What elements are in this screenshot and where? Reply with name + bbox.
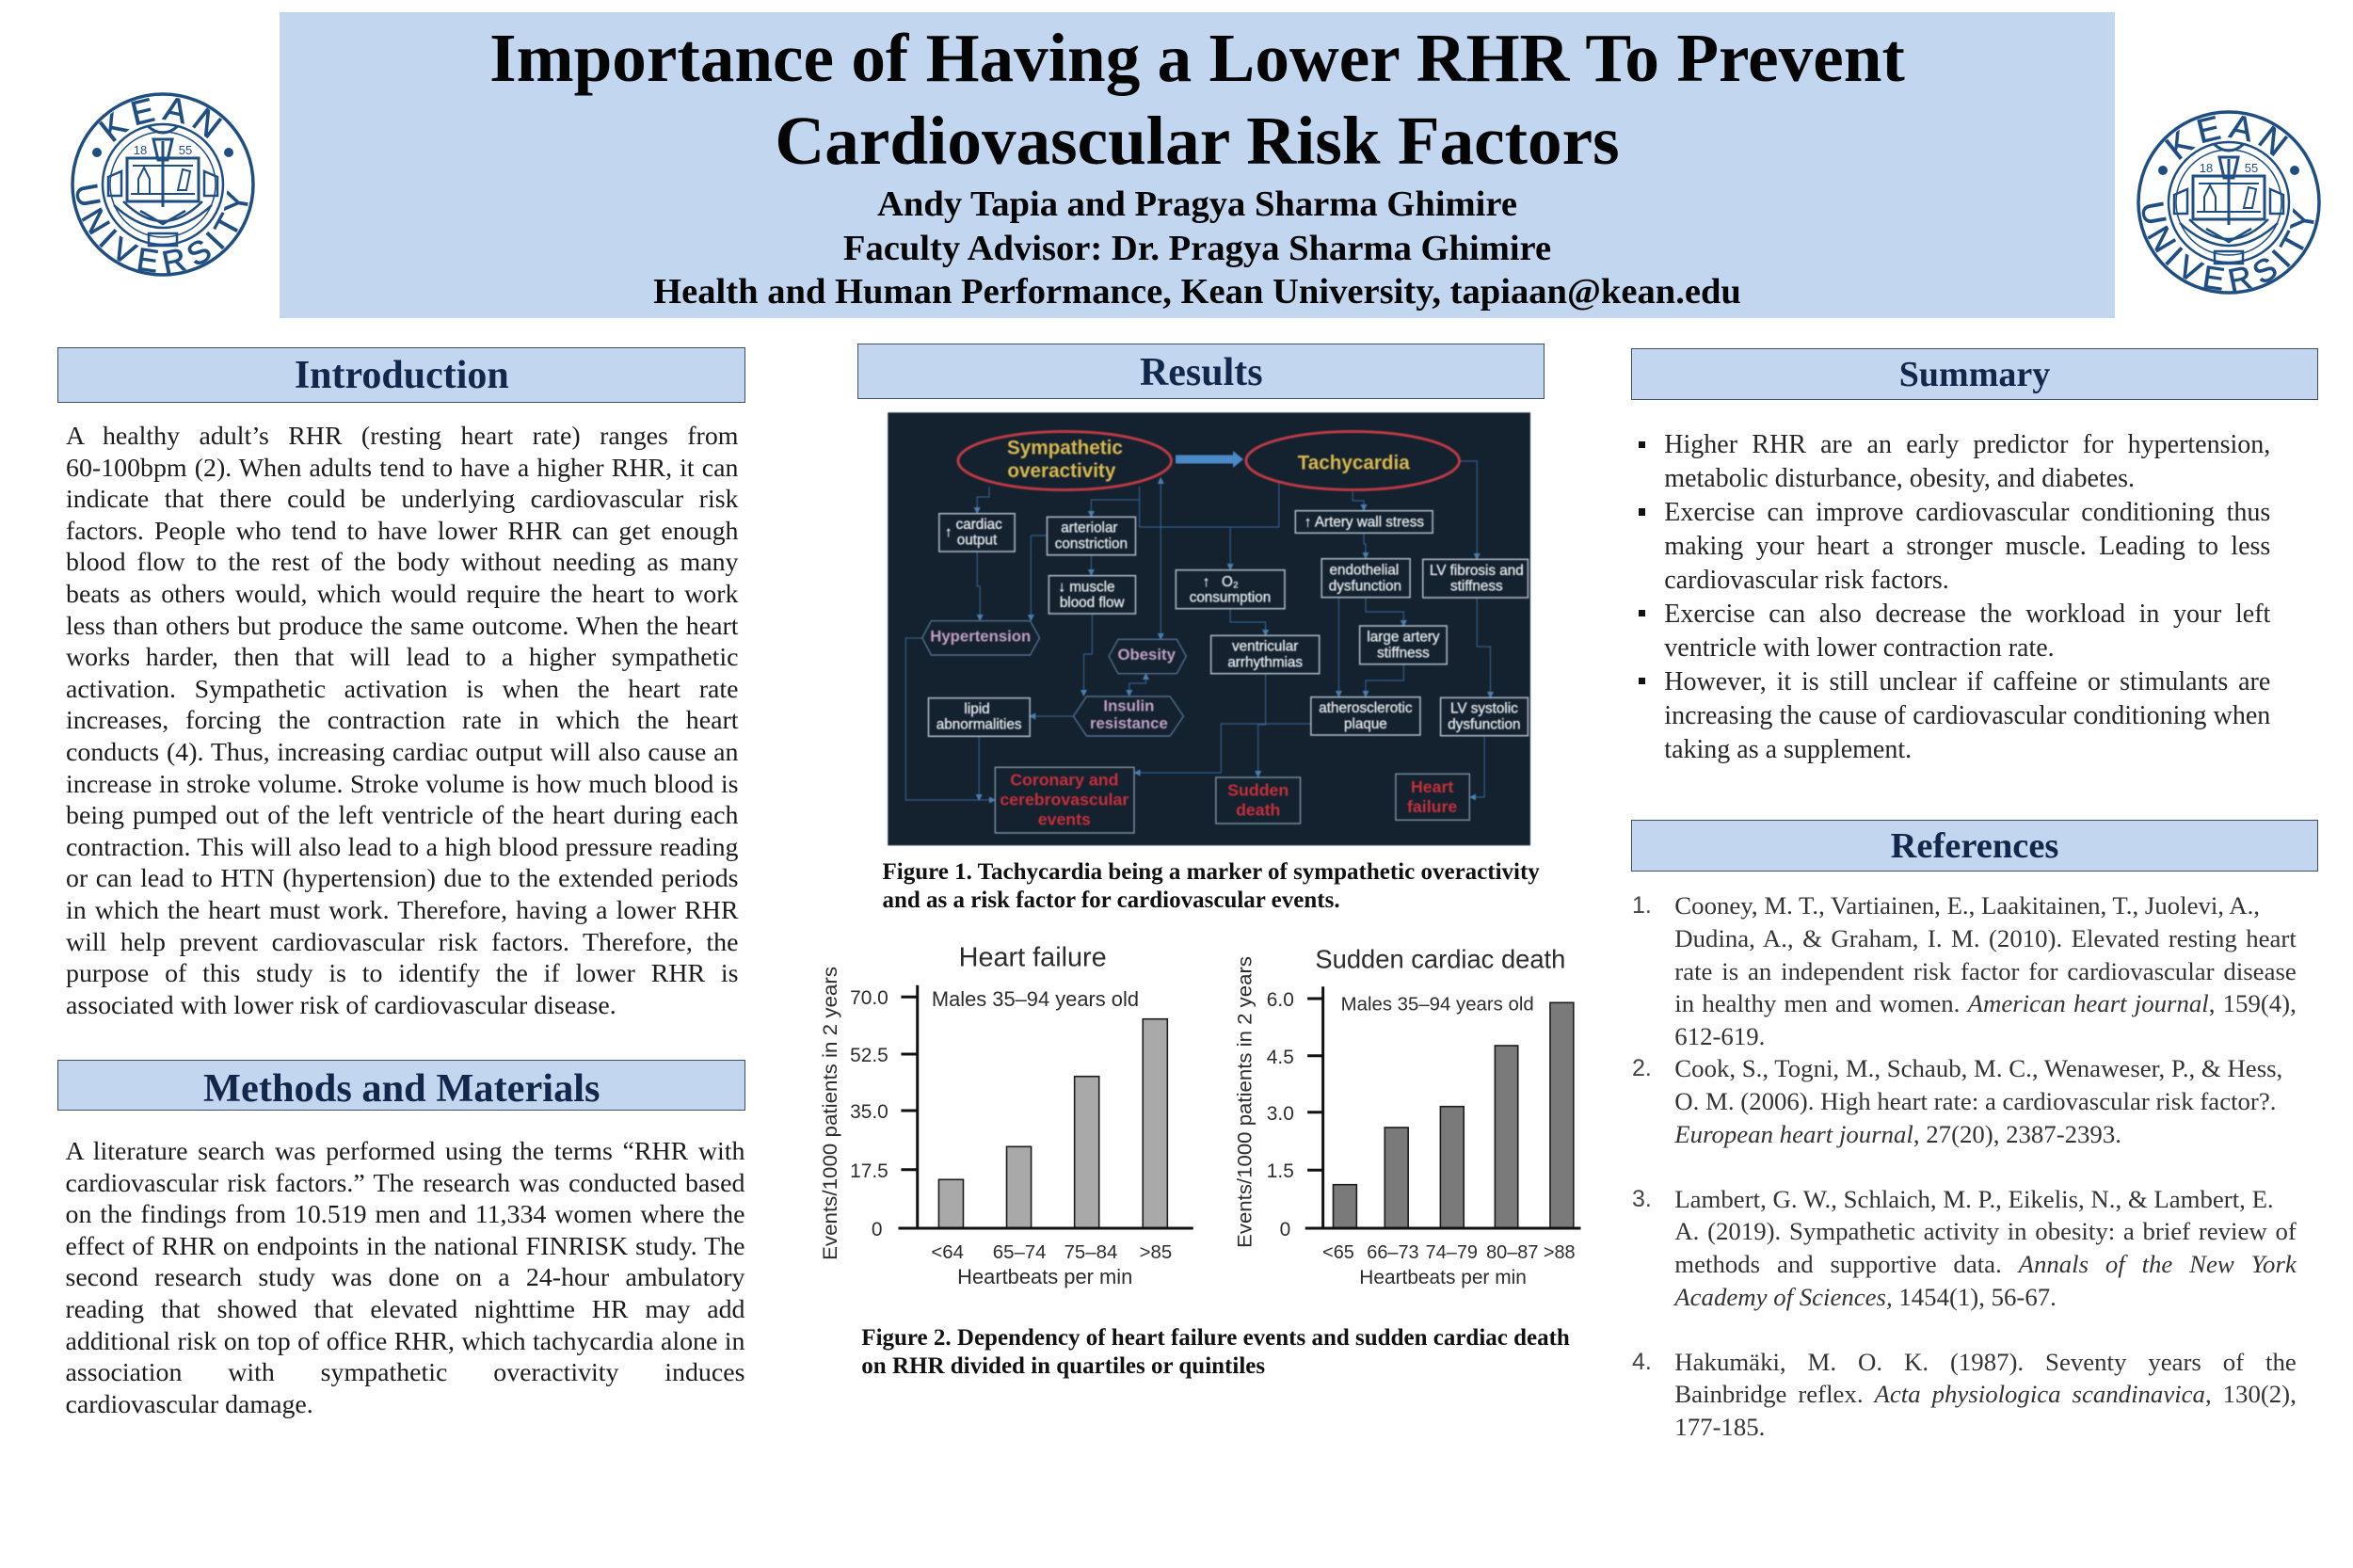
heading: References: References (1891, 826, 2058, 866)
hexagon labels: resistance (1090, 714, 1168, 732)
reference 3: Lambert, G. W., Schlaich, M. P., Eikelis, N., & Lambert, E. (1674, 1185, 2274, 1213)
box labels: stiffness (1377, 645, 1430, 661)
icon: Kean University seal left: KEAN (99, 98, 222, 142)
text block: introduction: increases, forcing the contraction rate in which the heart (66, 706, 738, 735)
text block: introduction: A healthy adult’s RHR (resting heart rate) ranges from (66, 422, 738, 451)
chart: heart failure: 0 (872, 1219, 883, 1240)
box labels: endothelial (1329, 563, 1399, 579)
text block: methods (66, 1137, 745, 1419)
reference 3: 3. (1632, 1186, 1652, 1212)
text block: introduction: or can lead to HTN (hypertension) due to the extended periods (66, 864, 738, 893)
header banner (280, 12, 2115, 318)
box labels: blood flow (1060, 595, 1125, 611)
reference 1: rate is an independent risk factor for cardiovascular disease (1674, 957, 2297, 985)
chart: sudden cardiac death: Events/1000 patients in 2 years (1234, 956, 1256, 1248)
hexagon labels: Insulin (1103, 696, 1154, 714)
box labels: cardiac (956, 517, 1002, 533)
bullet text: increasing the cause of cardiovascular conditioning when (1664, 701, 2270, 730)
icon: Kean University seal left (71, 92, 255, 277)
text block: introduction: will help prevent cardiovascular risk factors. Therefore, the (66, 928, 738, 956)
reference 4: Bainbridge reflex. Acta physiologica scandinavica, 130(2), (1674, 1380, 2297, 1408)
text block: introduction: works harder, then that will lead to a higher sympathetic (66, 643, 738, 672)
chart: sudden cardiac death (1234, 944, 1580, 1288)
box labels: ↓ muscle (1058, 579, 1115, 595)
ellipse: tachycardia (1246, 431, 1459, 489)
heading: Summary (1631, 348, 2318, 399)
box labels: consumption (1190, 589, 1271, 605)
heading: Methods and Materials (57, 1060, 745, 1111)
reference 1: Cooney, M. T., Vartiainen, E., Laakitainen, T., Juolevi, A., (1674, 891, 2260, 920)
chart: heart failure: 70.0 (850, 987, 888, 1009)
ellipse: sympathetic overactivity (958, 431, 1172, 489)
chart: heart failure: 35.0 (850, 1101, 888, 1123)
chart: sudden cardiac death: 66–73 (1367, 1242, 1419, 1263)
reference 1 (1632, 891, 2297, 1050)
bullet text: taking as a supplement. (1664, 735, 1912, 764)
chart: heart failure: <64 (931, 1241, 964, 1263)
box labels: dysfunction (1448, 716, 1520, 732)
reference 1: in healthy men and women. American heart journal, 159(4), (1674, 989, 2297, 1017)
text block: introduction: in which the heart must work. Therefore, having a lower RHR (66, 896, 738, 925)
box labels: ↑ (945, 525, 952, 540)
heading: Results (857, 344, 1545, 399)
chart: heart failure: Heartbeats per min (957, 1265, 1132, 1288)
chart: sudden cardiac death: 6.0 (1267, 989, 1294, 1011)
text block: introduction: contraction. This will also lead to a high blood pressure reading (66, 833, 738, 862)
heading: Summary: Summary (1899, 355, 2050, 394)
icon: Kean University seal left: 18 (134, 143, 147, 157)
title: Importance of Having a Lower RHR To Prevent (489, 20, 1905, 96)
text block: introduction: activation. Sympathetic activation is when the heart rate (66, 675, 738, 704)
heading: Introduction (57, 347, 745, 403)
reference 4: 177-185. (1674, 1413, 1765, 1441)
box labels: LV systolic (1450, 701, 1518, 717)
chart: heart failure: 52.5 (850, 1045, 888, 1066)
reference 1: Dudina, A., & Graham, I. M. (2010). Elevated resting heart (1674, 924, 2297, 952)
text block: methods: additional risk on top of office RHR, which tachycardia alone in (66, 1327, 745, 1356)
heading: Introduction: Introduction (295, 354, 509, 397)
text block: methods: second research study was done on a 24-hour ambulatory (66, 1263, 745, 1292)
hexagons (922, 621, 1186, 736)
text block: introduction: increase in stroke volume. Stroke volume is how much blood is (66, 770, 738, 799)
authors and affiliation: Health and Human Performance, Kean University, tapiaan@kean.edu (653, 272, 1741, 312)
bullet text: cardiovascular risk factors. (1664, 566, 1949, 595)
text block: introduction: conducts (4). Thus, increasing cardiac output will also cause an (66, 738, 738, 767)
box labels: plaque (1344, 716, 1387, 732)
chart: sudden cardiac death: Sudden cardiac death (1315, 944, 1565, 973)
text block: methods: A literature search was performed using the terms “RHR with (66, 1137, 745, 1166)
caption: figure 1 (883, 859, 1540, 913)
box labels: LV fibrosis and (1430, 563, 1524, 579)
reference 1: 612-619. (1674, 1022, 1765, 1050)
heading: Results: Results (1140, 351, 1263, 394)
chart: sudden cardiac death: Heartbeats per min (1359, 1267, 1527, 1288)
outcome labels: cerebrovascular (1000, 790, 1128, 808)
hexagon labels (930, 628, 1176, 732)
authors and affiliation: Andy Tapia and Pragya Sharma Ghimire (877, 184, 1517, 224)
ellipse: sympathetic overactivity: overactivity (1007, 460, 1116, 482)
chart: heart failure: Events/1000 patients in 2 years (820, 967, 841, 1260)
caption: figure 1: and as a risk factor for cardiovascular events. (883, 888, 1340, 913)
chart: sudden cardiac death: 74–79 (1426, 1242, 1478, 1263)
list: references (1632, 891, 2297, 1441)
hexagon labels: Hypertension (930, 628, 1031, 646)
outcome labels: Coronary and (1010, 770, 1118, 789)
text block: methods: cardiovascular risk factors.” The research was conducted based (66, 1169, 745, 1198)
caption: figure 2: Figure 2. Dependency of heart failure events and sudden cardiac death (861, 1325, 1570, 1351)
chart: sudden cardiac death: 1.5 (1267, 1160, 1294, 1182)
outcome boxes (995, 767, 1469, 833)
outcome labels: failure (1407, 797, 1457, 816)
outcome labels: Heart (1411, 777, 1453, 796)
white-text boxes (928, 511, 1528, 736)
text block: introduction: blood flow to the rest of the body without needing as many (66, 548, 738, 577)
chart: sudden cardiac death: >88 (1544, 1242, 1576, 1263)
box labels: arrhythmias (1227, 654, 1303, 670)
box labels: atherosclerotic (1319, 700, 1413, 716)
chart: heart failure: 65–74 (993, 1241, 1047, 1263)
box labels: ↑ Artery wall stress (1305, 514, 1424, 530)
reference 3: Academy of Sciences, 1454(1), 56-67. (1674, 1283, 2057, 1311)
text block: methods: cardiovascular damage. (66, 1390, 313, 1419)
caption: figure 2 (861, 1325, 1570, 1379)
text block: introduction: associated with lower risk of cardiovascular disease. (66, 991, 616, 1020)
chart: heart failure (820, 943, 1193, 1288)
icon: Kean University seal right (2137, 110, 2321, 295)
chart: sudden cardiac death: 3.0 (1267, 1103, 1294, 1125)
text block: introduction (66, 422, 738, 1020)
reference 2: 2. (1632, 1055, 1652, 1081)
text block: introduction: purpose of this study is to identify the if lower RHR is (66, 959, 738, 988)
text block: introduction: less than others but produce the same outcome. When the heart (66, 612, 738, 641)
title (489, 20, 1905, 179)
reference 2: Cook, S., Togni, M., Schaub, M. C., Wenaweser, P., & Hess, (1674, 1054, 2282, 1082)
bullet text: making your heart a stronger muscle. Leading to less (1664, 532, 2270, 561)
arrow: sympathetic to tachycardia (1176, 451, 1243, 468)
outcome labels: death (1236, 801, 1280, 820)
reference 4: Hakumäki, M. O. K. (1987). Seventy years of the (1674, 1348, 2297, 1376)
bullet text: Exercise can improve cardiovascular conditioning thus (1664, 498, 2270, 527)
hexagon labels: Obesity (1118, 646, 1176, 664)
bar charts: heart failure and sudden cardiac death (820, 943, 1581, 1288)
reference 2: O. M. (2006). High heart rate: a cardiovascular risk factor?. (1674, 1087, 2276, 1115)
heading: Methods and Materials: Methods and Materials (203, 1066, 600, 1111)
heading: References (1631, 820, 2318, 872)
chart: heart failure: >85 (1140, 1241, 1172, 1263)
bullet markers (1639, 441, 1645, 684)
box labels: abnormalities (936, 717, 1022, 733)
reference 4: 4. (1632, 1349, 1652, 1375)
chart: sudden cardiac death: 4.5 (1267, 1047, 1294, 1068)
box labels: constriction (1055, 536, 1128, 552)
text block: introduction: factors. People who tend to have lower RHR can get enough (66, 517, 738, 546)
text block: introduction: being pumped out of the left ventricle of the heart during each (66, 801, 738, 830)
chart: sudden cardiac death: 80–87 (1486, 1242, 1538, 1263)
ellipse: tachycardia: Tachycardia (1298, 453, 1410, 474)
box labels: stiffness (1450, 579, 1503, 595)
icon: Kean University seal left: 55 (179, 143, 192, 157)
bullet text: Higher RHR are an early predictor for hypertension, (1664, 430, 2270, 459)
chart: sudden cardiac death: <65 (1322, 1242, 1354, 1263)
authors and affiliation (653, 184, 1741, 312)
reference 2: European heart journal, 27(20), 2387-2393. (1674, 1120, 2121, 1148)
reference 4 (1632, 1348, 2297, 1441)
outcome labels: events (1038, 810, 1091, 829)
bullet text (1664, 430, 2270, 764)
text block: methods: on the findings from 10.519 men and 11,334 women where the (66, 1200, 745, 1229)
icon: Kean University seal right: KEAN (2165, 115, 2289, 160)
reference 2 (1632, 1054, 2282, 1148)
authors and affiliation: Faculty Advisor: Dr. Pragya Sharma Ghimire (843, 228, 1551, 267)
box labels: O₂ (1222, 574, 1239, 590)
ellipse: sympathetic overactivity: Sympathetic (1007, 438, 1123, 459)
box labels: output (957, 533, 998, 549)
chart: heart failure: 75–84 (1064, 1241, 1117, 1263)
list: summary points (1639, 430, 2270, 764)
text block: methods: association with sympathetic overactivity induces (66, 1358, 745, 1387)
bullet text: Exercise can also decrease the workload in your left (1664, 600, 2270, 629)
bullet text: metabolic disturbance, obesity, and diabetes. (1664, 464, 2135, 493)
chart: sudden cardiac death: Males 35–94 years old (1341, 993, 1534, 1015)
reference 3: methods and supportive data. Annals of the New York (1674, 1250, 2297, 1278)
bullet text: However, it is still unclear if caffeine or stimulants are (1664, 667, 2270, 696)
text block: introduction: 60-100bpm (2). When adults tend to have a higher RHR, it can (66, 454, 738, 483)
text block: introduction: indicate that there could be underlying cardiovascular risk (66, 485, 738, 514)
chart: heart failure: Heart failure (959, 943, 1107, 973)
box labels: large artery (1367, 630, 1440, 646)
box labels: lipid (964, 701, 990, 717)
box labels: arteriolar (1061, 520, 1118, 536)
icon: Kean University seal right: 55 (2245, 161, 2258, 175)
title: Cardiovascular Risk Factors (775, 103, 1620, 179)
text block: introduction: beats as others would, which would require the heart to work (66, 580, 738, 609)
chart: heart failure: Males 35–94 years old (932, 987, 1139, 1011)
reference 1: 1. (1632, 892, 1652, 919)
chart: sudden cardiac death: 0 (1280, 1219, 1290, 1240)
caption: figure 2: on RHR divided in quartiles or quintiles (861, 1353, 1265, 1379)
box labels: ventricular (1232, 639, 1298, 655)
box labels (936, 514, 1524, 733)
bullet text: ventricle with lower contraction rate. (1664, 633, 2055, 663)
reference 3: A. (2019). Sympathetic activity in obesity: a brief review of (1674, 1217, 2297, 1245)
flow diagram: sympathetic overactivity and tachycardia (887, 412, 1531, 847)
box labels: dysfunction (1329, 578, 1401, 594)
outcome labels: Sudden (1227, 781, 1289, 800)
icon: Kean University seal right: 18 (2200, 161, 2213, 175)
caption: figure 1: Figure 1. Tachycardia being a marker of sympathetic overactivity (883, 859, 1540, 885)
reference 3 (1632, 1185, 2297, 1311)
outcome labels (1000, 770, 1457, 829)
chart: heart failure: 17.5 (850, 1160, 888, 1182)
box labels: ↑ (1203, 574, 1209, 590)
text block: methods: effect of RHR on endpoints in the national FINRISK study. The (66, 1232, 745, 1261)
text block: methods: reading that showed that elevated nighttime HR may add (66, 1295, 745, 1324)
